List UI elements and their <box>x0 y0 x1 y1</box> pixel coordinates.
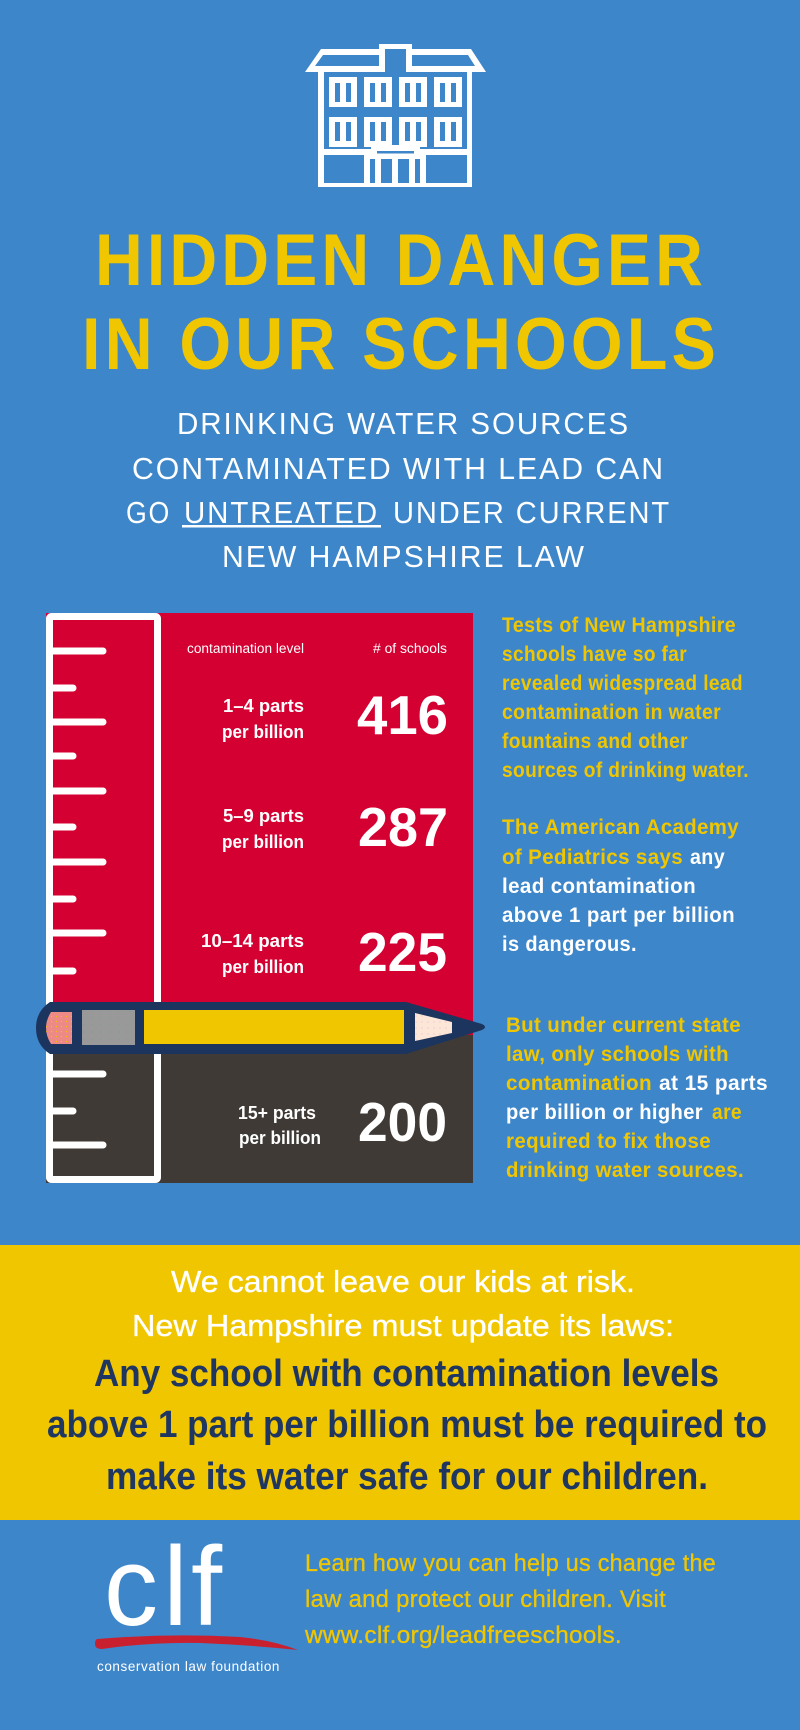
row: 15+ parts per billion, 200 schools: 15+ parts <box>238 1102 316 1123</box>
call to action intro: New Hampshire must update its laws: <box>132 1308 674 1343</box>
row: 15+ parts per billion, 200 schools: per billion <box>239 1127 321 1148</box>
icon: pencil <box>36 1002 485 1054</box>
subtitle: DRINKING WATER SOURCES <box>177 406 630 441</box>
row: 10–14 parts per billion, 225 schools: per billion <box>222 956 304 977</box>
row: 15+ parts per billion, 200 schools: 200 <box>358 1091 447 1153</box>
text: American Academy of Pediatrics: The American Academy <box>502 816 739 839</box>
text: tests of New Hampshire schools <box>502 614 749 782</box>
subtitle: UNDER CURRENT <box>393 495 671 530</box>
ruler <box>50 616 158 1180</box>
text: current state law: at 15 parts <box>659 1072 768 1095</box>
text: tests of New Hampshire schools: fountains and other <box>502 730 688 753</box>
logo: conservation law foundation: c <box>104 1524 158 1649</box>
text: current state law: contamination <box>506 1072 652 1095</box>
text: footer call to action <box>304 1550 716 1649</box>
text: footer call to action: www.clf.org/leadfreeschools. <box>304 1622 622 1649</box>
row: 5–9 parts per billion, 287 schools: 287 <box>358 796 448 858</box>
text: American Academy of Pediatrics: is dangerous. <box>502 933 637 956</box>
text: current state law: required to fix those <box>506 1130 711 1153</box>
text: current state law: law, only schools with <box>506 1043 729 1066</box>
title <box>82 220 720 385</box>
text: tests of New Hampshire schools: schools have so far <box>502 643 687 666</box>
subtitle: CONTAMINATED WITH LEAD CAN <box>132 451 665 486</box>
row: 5–9 parts per billion, 287 schools: per billion <box>222 831 304 852</box>
subtitle: UNTREATED <box>184 495 379 530</box>
text: current state law: But under current state <box>506 1014 741 1037</box>
title: HIDDEN DANGER <box>95 220 707 301</box>
call to action demand <box>47 1353 767 1498</box>
column headers: contamination level <box>187 641 304 656</box>
title: IN OUR SCHOOLS <box>82 304 720 385</box>
column headers <box>187 641 447 656</box>
text: footer call to action: law and protect our children. Visit <box>305 1586 666 1613</box>
logo: conservation law foundation <box>95 1524 298 1674</box>
text: current state law: are <box>712 1101 742 1124</box>
call to action intro <box>132 1264 674 1343</box>
column headers: # of schools <box>373 641 447 656</box>
text: American Academy of Pediatrics: any <box>690 846 725 869</box>
call to action demand: make its water safe for our children. <box>106 1456 708 1498</box>
row: 1–4 parts per billion, 416 schools: per billion <box>222 721 304 742</box>
text: American Academy of Pediatrics: of Pediatrics says <box>502 846 683 869</box>
text: tests of New Hampshire schools: Tests of New Hampshire <box>502 614 736 637</box>
row: 10–14 parts per billion, 225 schools <box>201 921 447 983</box>
row: 1–4 parts per billion, 416 schools <box>222 684 448 746</box>
row: 5–9 parts per billion, 287 schools <box>222 796 448 858</box>
text: American Academy of Pediatrics: above 1 part per billion <box>502 904 735 927</box>
subtitle <box>126 406 671 574</box>
row: 10–14 parts per billion, 225 schools: 225 <box>358 921 447 983</box>
logo: conservation law foundation: l <box>163 1524 188 1649</box>
text: tests of New Hampshire schools: revealed widespread lead <box>502 672 743 695</box>
text: tests of New Hampshire schools: sources of drinking water. <box>502 759 749 782</box>
row: 1–4 parts per billion, 416 schools: 416 <box>357 684 448 746</box>
text: current state law: per billion or higher <box>506 1101 703 1124</box>
row: 10–14 parts per billion, 225 schools: 10–14 parts <box>201 930 304 951</box>
text: footer call to action: Learn how you can help us change the <box>305 1550 716 1577</box>
text: tests of New Hampshire schools: contamination in water <box>502 701 721 724</box>
panel: contamination levels chart <box>46 613 473 1183</box>
text: American Academy of Pediatrics <box>502 816 739 956</box>
call to action demand: Any school with contamination levels <box>94 1353 719 1395</box>
row: 1–4 parts per billion, 416 schools: 1–4 parts <box>223 695 304 716</box>
call to action intro: We cannot leave our kids at risk. <box>171 1264 635 1299</box>
text: American Academy of Pediatrics: lead contamination <box>502 875 696 898</box>
text: current state law <box>506 1014 768 1182</box>
icon: school building <box>305 44 486 187</box>
text: current state law: drinking water sources. <box>506 1159 744 1182</box>
subtitle: NEW HAMPSHIRE LAW <box>222 539 586 574</box>
panel: call to action band <box>0 1245 800 1520</box>
row: 15+ parts per billion, 200 schools <box>238 1091 447 1153</box>
logo: conservation law foundation: f <box>191 1524 223 1649</box>
subtitle: GO <box>126 495 171 530</box>
row: 5–9 parts per billion, 287 schools: 5–9 parts <box>223 805 304 826</box>
logo: conservation law foundation: conservation law foundation <box>97 1658 280 1674</box>
